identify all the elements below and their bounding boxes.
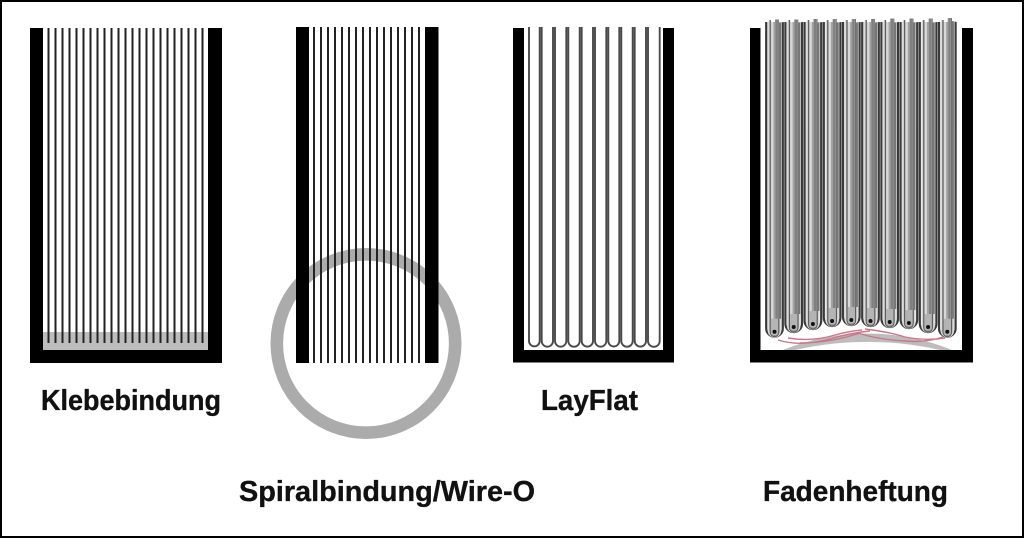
label: LayFlat: LayFlat [541,385,638,417]
book cover [513,28,674,362]
curved spine shadow [783,334,952,350]
right cover [425,27,438,363]
diagram: LayFlat [513,27,674,362]
book cover [750,28,973,362]
label: Klebebindung: Klebebindung [41,385,221,417]
sewn signatures [766,0,956,337]
label: Fadenheftung: Fadenheftung [763,476,948,508]
diagram: Fadenheftung [750,0,973,362]
binding thread [778,329,945,343]
label: Spiralbindung/Wire-O: Spiralbindung/Wire-O [239,476,535,508]
diagram: Klebebindung [30,28,222,363]
diagram: Spiralbindung [277,27,455,433]
loose pages [314,27,419,363]
folded pages [529,27,660,347]
glued pages [48,28,202,343]
spiral wire circle [277,254,455,433]
book cover [30,28,222,363]
glue layer [43,332,208,350]
left cover [296,27,309,363]
